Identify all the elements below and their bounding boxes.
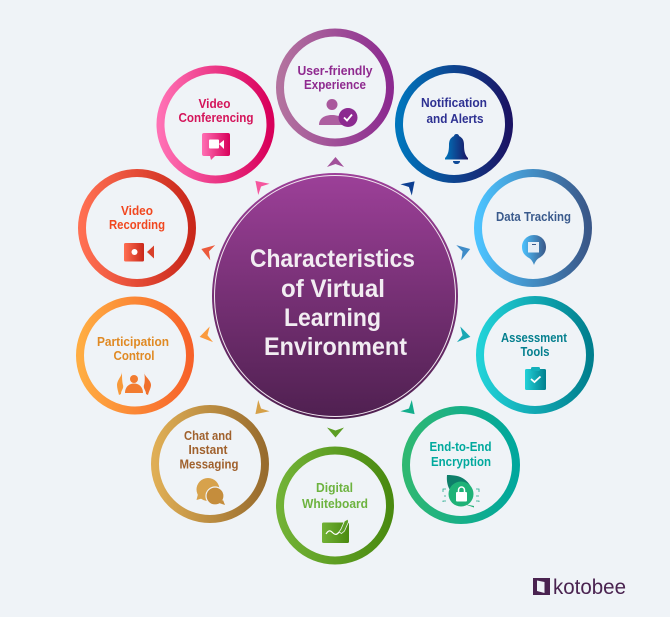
central circle: title: Learning (284, 304, 381, 332)
panel: notification and alerts (399, 69, 509, 179)
panel: participation control: Participation (97, 334, 169, 349)
panel: video recording: Video (121, 203, 153, 218)
icon: video camera (124, 243, 154, 262)
central circle: title: Characteristics (250, 245, 415, 273)
panel: data tracking: Data Tracking (496, 209, 571, 224)
arrow: to end-to-end encryption (400, 400, 420, 420)
arrow: to video recording (199, 241, 215, 260)
arrow: to user-friendly experience (327, 157, 344, 167)
panel: chat and instant messaging: Chat and (184, 428, 232, 443)
panel: user-friendly experience: Experience (304, 77, 366, 92)
arrow: to participation control (198, 327, 213, 345)
central circle: title: Environment (264, 333, 408, 361)
panel: user-friendly experience: User-friendly (298, 63, 373, 78)
icon: bell (445, 134, 468, 164)
panel: digital whiteboard: Digital (316, 480, 353, 495)
panel: assessment tools: Tools (520, 344, 550, 359)
icon: whiteboard with pen (322, 519, 349, 543)
icon: video chat bubble (202, 133, 230, 160)
panel: data tracking (478, 173, 588, 283)
panel: digital whiteboard: Whiteboard (302, 496, 368, 511)
icon: clipboard check (525, 367, 546, 390)
icon: hands around person (117, 372, 151, 395)
arrow: to data tracking (456, 241, 473, 260)
panel: assessment tools: Assessment (501, 330, 568, 345)
panel: notification and alerts: Notification (421, 95, 487, 110)
arrow: to chat and instant messaging (250, 400, 270, 420)
panel: video conferencing: Conferencing (178, 110, 254, 125)
panel: video conferencing: Video (198, 96, 231, 111)
panel: chat and instant messaging (155, 409, 265, 519)
logo: kotobee: kotobee (553, 576, 626, 599)
panel: participation control: Control (114, 348, 154, 363)
central circle: title (212, 173, 458, 419)
panel: video recording: Recording (109, 217, 165, 232)
panel: digital whiteboard (280, 450, 390, 560)
arrow: to video conferencing (250, 175, 270, 195)
panel: end-to-end encryption (406, 410, 516, 520)
panel: chat and instant messaging: Messaging (180, 456, 239, 472)
panel: notification and alerts: and Alerts (426, 111, 484, 126)
panel: assessment tools (480, 300, 590, 410)
panel: end-to-end encryption: End-to-End (430, 439, 492, 454)
panel: participation control (80, 300, 190, 410)
arrow: to digital whiteboard (327, 428, 344, 438)
panel: user-friendly experience (280, 32, 390, 142)
icon: lock in chat bubble (443, 475, 479, 508)
panel: video conferencing (160, 70, 270, 180)
icon: user with check (319, 99, 358, 127)
icon: location pin with box (522, 235, 546, 265)
arrow: to notification and alerts (400, 176, 420, 196)
icon: chat bubbles (196, 478, 225, 505)
panel: end-to-end encryption: Encryption (431, 454, 491, 469)
central circle: title: of Virtual (281, 275, 385, 303)
arrow: to assessment tools (457, 327, 472, 345)
panel: video recording (82, 173, 192, 283)
panel: chat and instant messaging: Instant (188, 442, 228, 457)
